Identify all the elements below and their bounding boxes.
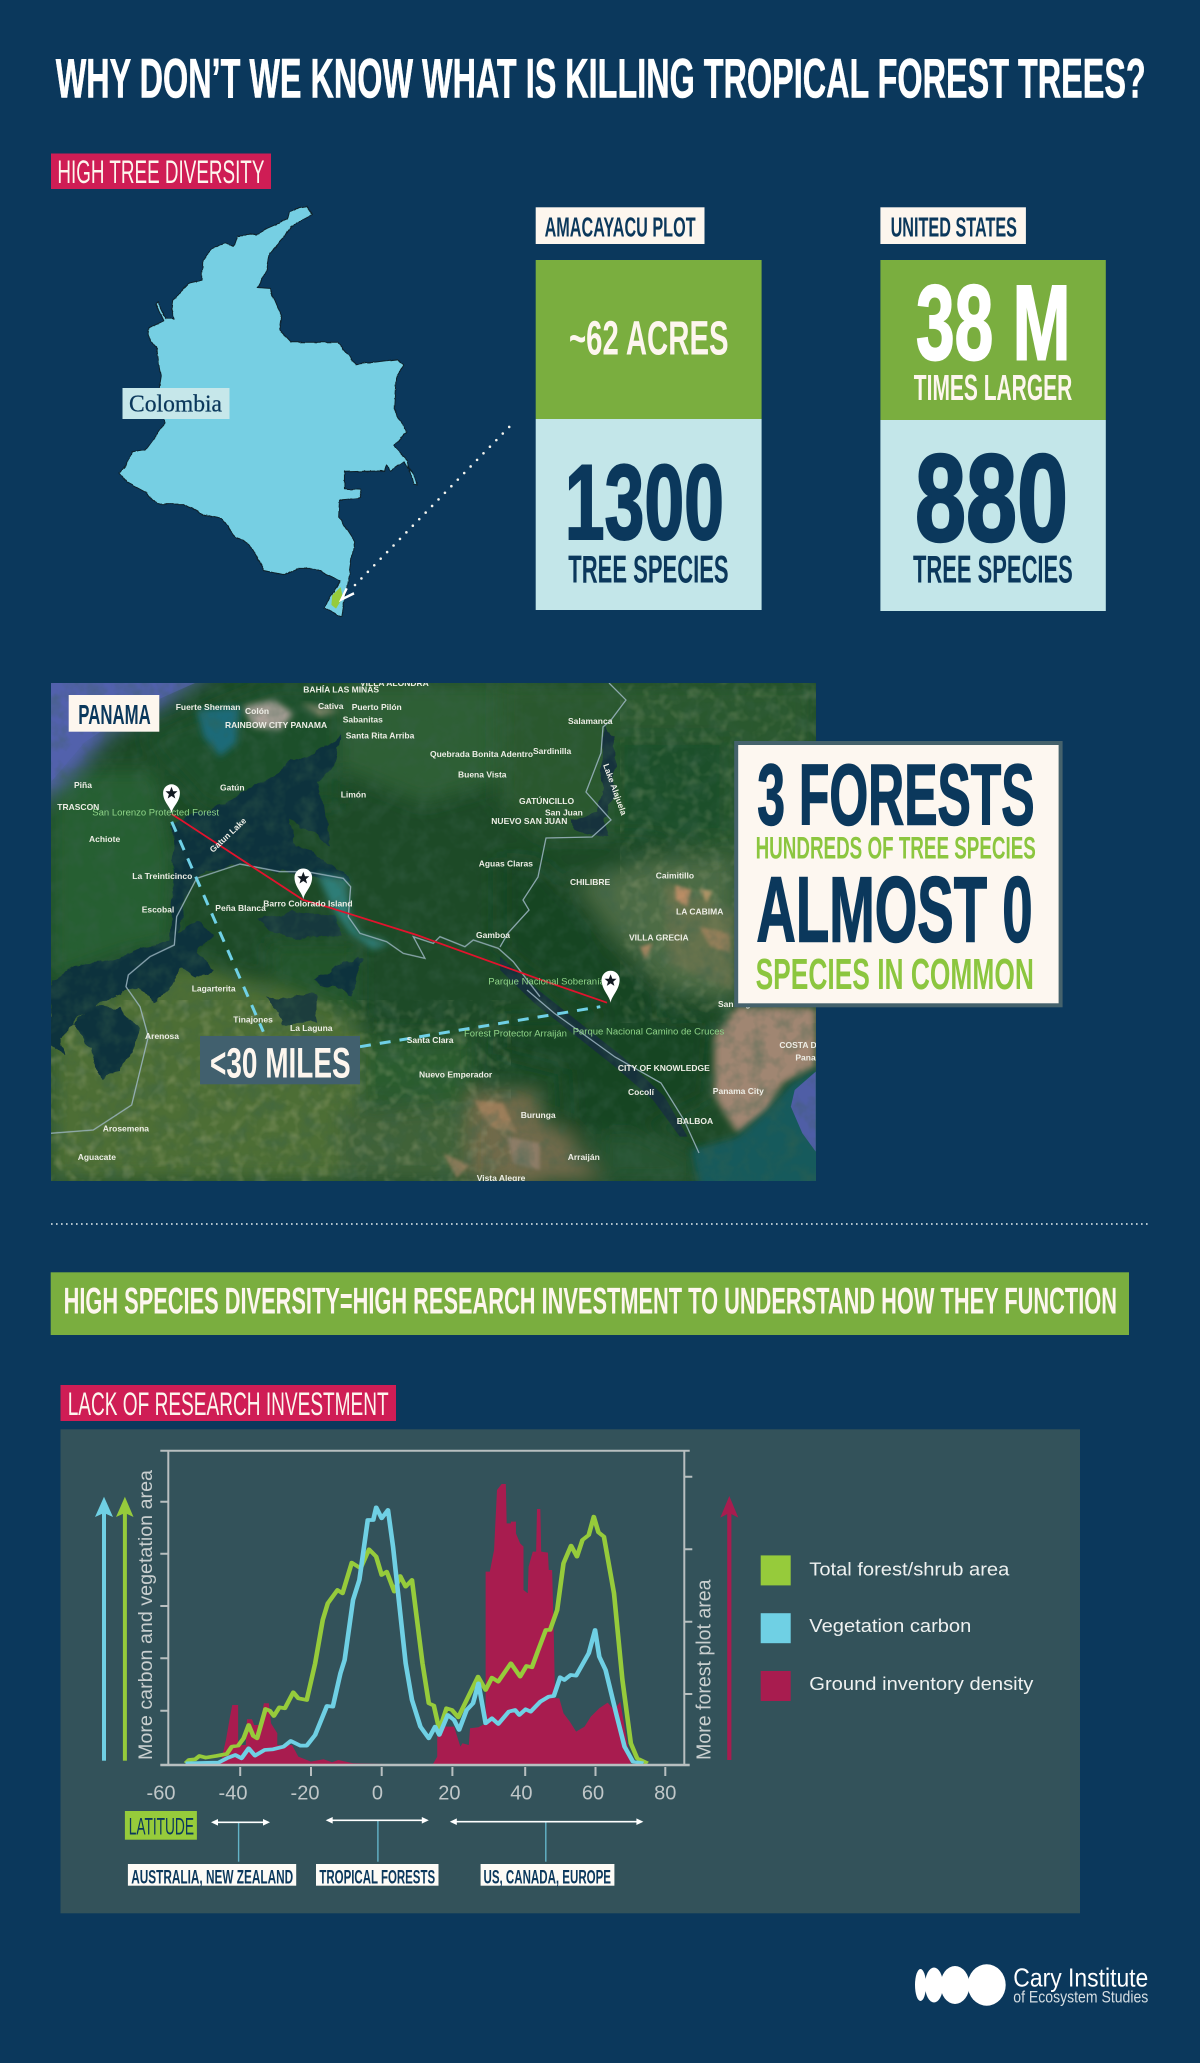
place labels: Panama City bbox=[713, 1086, 764, 1096]
x axis numbers: 0 bbox=[372, 1782, 383, 1804]
pin: Soberania bbox=[602, 971, 620, 1003]
tag: Panama bbox=[69, 695, 159, 732]
dotted connector bbox=[355, 421, 515, 585]
dashed distance lines bbox=[172, 822, 600, 1047]
x axis numbers: 80 bbox=[654, 1782, 676, 1804]
tag: latitude: LATITUDE bbox=[129, 1813, 194, 1840]
species card: TREE SPECIES bbox=[568, 549, 729, 592]
tag: AMACAYACU PLOT bbox=[545, 212, 696, 243]
place labels: Gamboa bbox=[476, 930, 510, 940]
callout: under 30 miles: <30 MILES bbox=[210, 1039, 351, 1087]
logo: Cary Institute bbox=[915, 1962, 1148, 2006]
species card bbox=[880, 420, 1106, 611]
area card: ~62 ACRES bbox=[569, 313, 729, 366]
species card bbox=[536, 419, 762, 610]
place labels: Santa Clara bbox=[407, 1035, 454, 1045]
range: US, Canada, Europe: US, CANADA, EUROPE bbox=[484, 1866, 611, 1888]
country outline bbox=[119, 207, 417, 617]
left axis label: More carbon and vegetation area bbox=[136, 1470, 157, 1760]
place labels: NUEVO SAN JUAN bbox=[491, 816, 567, 826]
range: Australia, New Zealand: AUSTRALIA, NEW ZEALAND bbox=[131, 1866, 293, 1888]
pale clearings bbox=[51, 1000, 511, 1181]
x axis numbers: 40 bbox=[510, 1782, 533, 1804]
panel: United States bbox=[880, 207, 1106, 611]
place labels: Escobal bbox=[142, 905, 174, 915]
place labels: Santa Rita Arriba bbox=[346, 730, 415, 740]
x axis numbers: 60 bbox=[582, 1782, 604, 1804]
place labels: Fuerte Sherman bbox=[176, 702, 240, 712]
place labels: Puerto Pilón bbox=[352, 702, 402, 712]
plot location marker bbox=[331, 587, 354, 609]
place labels: LA CABIMA bbox=[676, 906, 723, 916]
place labels: Arenosa bbox=[145, 1031, 179, 1041]
place labels: La Treinticinco bbox=[132, 871, 192, 881]
logo mark bbox=[915, 1964, 1006, 2006]
place labels: Nuevo Emperador bbox=[419, 1070, 493, 1080]
arrow: forest plot up bbox=[720, 1496, 738, 1760]
chart axes bbox=[160, 1451, 692, 1776]
section tag: lack of research investment: LACK OF RESEARCH INVESTMENT bbox=[68, 1386, 389, 1422]
place labels: Limón bbox=[341, 790, 366, 800]
x axis numbers: 20 bbox=[438, 1782, 461, 1804]
place labels: Peña Blanca bbox=[215, 903, 266, 913]
species card: 1300 bbox=[565, 442, 724, 562]
place labels: Sabanitas bbox=[343, 714, 383, 724]
range: tropical forests: TROPICAL FORESTS bbox=[319, 1866, 435, 1888]
banner: research investment statement bbox=[51, 1272, 1129, 1335]
section tag: lack of research investment bbox=[60, 1385, 396, 1422]
species card: 880 bbox=[915, 430, 1068, 568]
logo: Cary Institute: of Ecosystem Studies bbox=[1013, 1988, 1148, 2006]
place labels: RAINBOW CITY PANAMA bbox=[225, 720, 327, 730]
total forest/shrub line bbox=[186, 1517, 648, 1763]
x axis numbers bbox=[147, 1782, 676, 1804]
tag: Panama: PANAMA bbox=[78, 699, 151, 730]
urban areas and clearings bbox=[640, 883, 816, 1133]
section tag: high tree diversity: HIGH TREE DIVERSITY bbox=[57, 154, 264, 190]
callout: 3 forests bbox=[736, 743, 1061, 1005]
arrow: carbon up bbox=[95, 1497, 113, 1761]
place labels: CITY OF KNOWLEDGE bbox=[618, 1063, 710, 1073]
range: US, Canada, Europe bbox=[450, 1818, 643, 1888]
place labels: TRASCON bbox=[57, 802, 99, 812]
right axis label: More forest plot area bbox=[694, 1579, 716, 1760]
section tag: high tree diversity bbox=[51, 154, 271, 190]
x axis numbers: -40 bbox=[219, 1782, 247, 1804]
place labels: CHILIBRE bbox=[570, 877, 610, 887]
size card bbox=[880, 260, 1106, 420]
map: Panama satellite bbox=[30, 660, 852, 1203]
place labels: Forest Protector Arraiján bbox=[464, 1029, 567, 1040]
x axis numbers: -20 bbox=[291, 1782, 319, 1804]
legend bbox=[761, 1555, 1034, 1701]
tag bbox=[536, 207, 704, 244]
place labels: Achiote bbox=[89, 834, 120, 844]
tag: latitude bbox=[125, 1811, 197, 1840]
place labels: Sardinilla bbox=[533, 746, 572, 756]
place labels: La Laguna bbox=[290, 1023, 333, 1033]
map: Colombia bbox=[119, 207, 515, 617]
place labels: San Miguelito bbox=[718, 999, 773, 1009]
logo: Cary Institute: Cary Institute bbox=[1013, 1962, 1148, 1992]
place labels: Burunga bbox=[521, 1110, 556, 1120]
place labels bbox=[57, 678, 852, 1183]
place labels: Quebrada Bonita Adentro bbox=[430, 749, 533, 759]
place labels: Aguacate bbox=[78, 1152, 116, 1162]
pin: San Lorenzo bbox=[163, 784, 180, 813]
callout: under 30 miles bbox=[200, 1036, 360, 1087]
terrain base bbox=[51, 683, 816, 1181]
x axis numbers: -60 bbox=[147, 1782, 175, 1804]
panel: Amacayacu plot bbox=[536, 207, 762, 610]
legend: Total forest/shrub area bbox=[809, 1558, 1010, 1579]
range: tropical forests bbox=[316, 1817, 438, 1888]
vegetation carbon line bbox=[186, 1507, 643, 1763]
place labels: Tinajones bbox=[233, 1014, 273, 1024]
place labels: BAHÍA LAS MINAS bbox=[303, 685, 379, 695]
place labels: Vista Alegre bbox=[477, 1173, 526, 1183]
place labels: Gatún bbox=[220, 783, 245, 793]
place labels: Lake Alajuela bbox=[601, 762, 629, 817]
place labels: San Lorenzo Protected Forest bbox=[92, 807, 219, 818]
place labels: Gatun Lake bbox=[208, 815, 248, 854]
ground inventory density area bbox=[220, 1484, 631, 1764]
chart series bbox=[186, 1484, 648, 1764]
place labels: Salamanca bbox=[568, 716, 613, 726]
place labels: Colón bbox=[245, 706, 269, 716]
place labels: Caimitillo bbox=[656, 871, 694, 881]
place labels: Buena Vista bbox=[458, 770, 507, 780]
species card: TREE SPECIES bbox=[913, 549, 1073, 592]
size card: TIMES LARGER bbox=[914, 367, 1072, 408]
place labels: San Juan bbox=[545, 807, 583, 817]
range: Australia, New Zealand bbox=[128, 1819, 296, 1888]
place labels: Parque Nacional Soberanía bbox=[488, 977, 606, 988]
place labels: Aguas Claras bbox=[479, 858, 533, 868]
panel background bbox=[60, 1429, 1080, 1913]
tag: UNITED STATES bbox=[891, 212, 1017, 243]
panel: latitude chart bbox=[60, 1429, 1080, 1913]
place labels: COSTA DEL ESTE bbox=[779, 1040, 852, 1050]
size card: 38 M bbox=[916, 262, 1070, 382]
lakes and sea bbox=[51, 683, 816, 1181]
tag bbox=[880, 207, 1026, 244]
place labels: Panamá bbox=[795, 1053, 828, 1063]
place labels: VILLA ALONDRA bbox=[360, 678, 429, 688]
legend: Vegetation carbon bbox=[809, 1615, 971, 1636]
arrow: vegetation up bbox=[116, 1497, 134, 1761]
place labels: Piña bbox=[74, 780, 92, 790]
pin: Barro Colorado bbox=[294, 868, 312, 899]
legend: Ground inventory density bbox=[809, 1673, 1034, 1694]
place labels: Lagarterita bbox=[192, 984, 236, 994]
place labels: Cocolí bbox=[628, 1087, 655, 1097]
area card bbox=[536, 260, 762, 419]
place labels: Arosemena bbox=[103, 1123, 149, 1133]
place labels: Arraiján bbox=[568, 1152, 600, 1162]
red distance line bbox=[172, 814, 607, 1003]
place labels: Cativa bbox=[318, 701, 344, 711]
place labels: VILLA GRECIA bbox=[629, 932, 689, 942]
place labels: Parque Nacional Camino de Cruces bbox=[573, 1027, 725, 1038]
canal and border lines bbox=[51, 683, 699, 1153]
terrain texture bbox=[51, 683, 816, 1181]
place labels: Barro Colorado Island bbox=[263, 898, 353, 908]
place labels: GATÚNCILLO bbox=[519, 795, 574, 806]
country label: Colombia bbox=[129, 392, 222, 418]
place labels: BALBOA bbox=[677, 1116, 713, 1126]
